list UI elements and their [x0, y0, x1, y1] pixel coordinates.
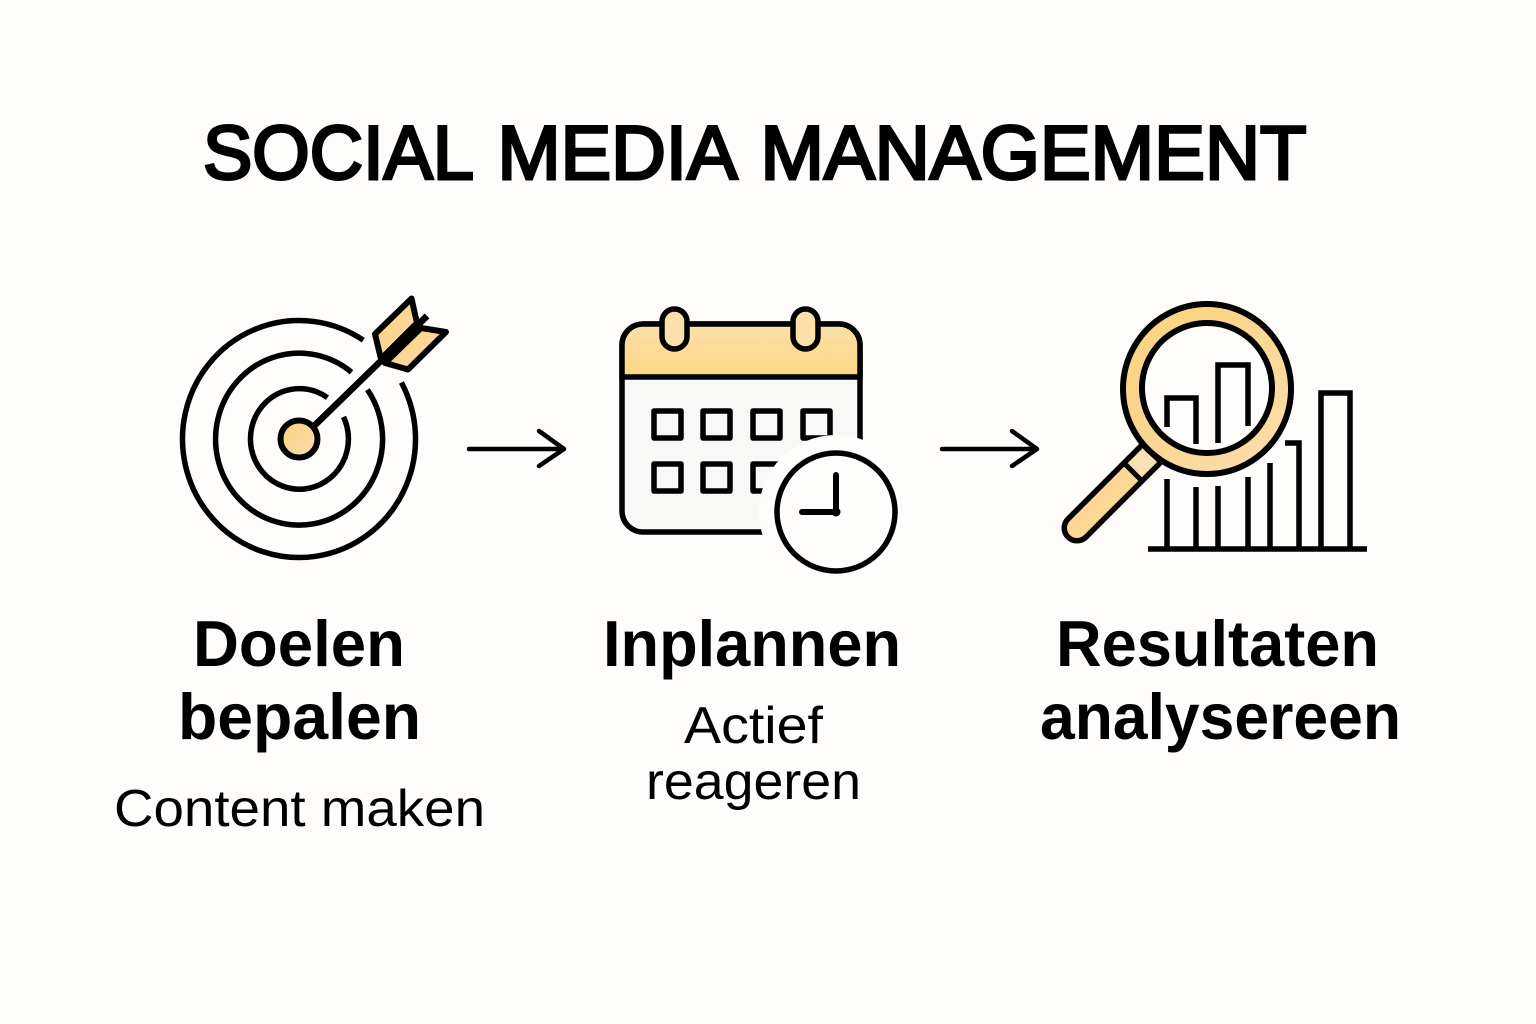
arrow feather right — [385, 328, 446, 370]
title: SOCIAL — [203, 111, 474, 196]
text: Actief reageren: Actief — [684, 697, 824, 755]
title: MEDIA — [498, 111, 738, 196]
text: Content maken: Content maken — [114, 780, 485, 838]
icon: calendar with clock — [622, 309, 913, 589]
heading: Inplannen: Inplannen — [603, 607, 901, 680]
heading: Doelen bepalen: Doelen — [193, 607, 405, 680]
heading: Resultaten analysereen — [1040, 607, 1401, 753]
arrow: step 2 to step 3 — [942, 431, 1037, 466]
heading: Resultaten analysereen: analysereen — [1040, 680, 1401, 753]
heading: Resultaten analysereen: Resultaten — [1056, 607, 1379, 680]
clock halo — [759, 435, 913, 589]
bullseye — [280, 420, 318, 458]
clock hands — [802, 475, 836, 512]
calendar body — [622, 324, 860, 532]
title: MANAGEMENT — [760, 111, 1306, 196]
icon: magnifier over bar chart — [1077, 304, 1367, 549]
text: Actief reageren: reageren — [646, 753, 861, 811]
middle target ring — [216, 353, 383, 525]
arrow: step 1 to step 2 — [469, 431, 564, 466]
heading: Doelen bepalen — [178, 607, 421, 753]
arrow shaft — [313, 316, 427, 427]
arrow feather left — [375, 298, 417, 359]
magnifier handle — [1077, 455, 1150, 528]
shaft over fletching — [381, 316, 427, 361]
text: Actief reageren — [646, 697, 861, 811]
calendar day cells — [654, 411, 830, 491]
title — [203, 111, 1306, 196]
bar chart — [1148, 365, 1367, 549]
calendar ring left — [662, 309, 687, 349]
calendar header — [622, 324, 860, 377]
calendar ring right — [793, 309, 818, 349]
clock face — [777, 453, 895, 571]
inner target ring — [250, 389, 348, 489]
magnifier lens ring — [1123, 304, 1291, 474]
heading: Doelen bepalen: bepalen — [178, 680, 421, 753]
icon: target with arrow — [183, 298, 446, 558]
outer target ring — [183, 321, 416, 558]
